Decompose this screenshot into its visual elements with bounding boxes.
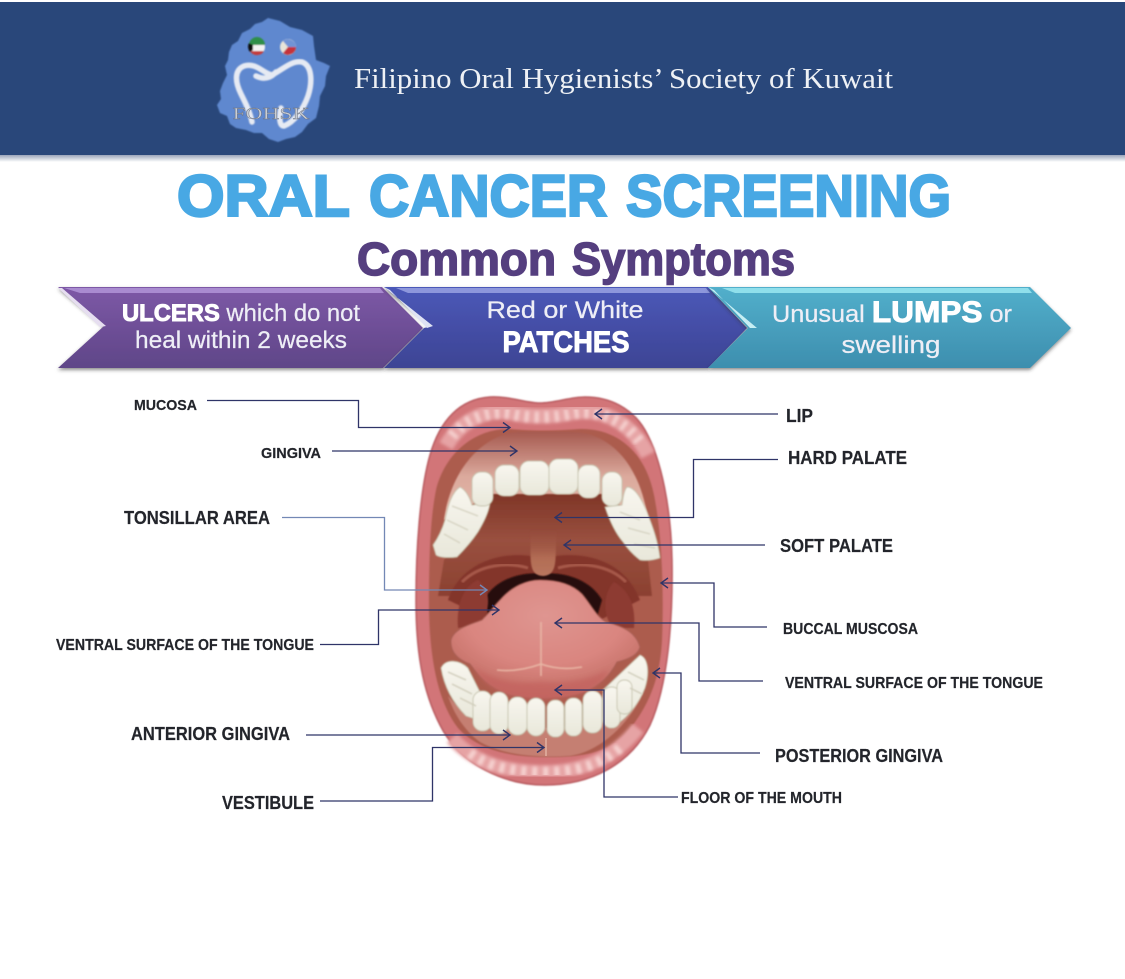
label: ventral surface right xyxy=(555,618,1043,692)
cavity xyxy=(429,429,663,757)
label: posterior gingiva xyxy=(653,668,943,766)
chevron: ulcers: ULCERS which do not xyxy=(122,300,360,327)
soft palate arches xyxy=(448,555,640,620)
label: ventral surface left xyxy=(56,605,499,654)
tooth outline xyxy=(236,62,311,126)
tongue midline xyxy=(497,622,582,676)
title: SCREENING xyxy=(626,164,951,229)
chevron: patches xyxy=(384,287,747,368)
mouth illustration xyxy=(416,397,672,785)
label: anterior gingiva xyxy=(131,724,510,744)
label: tonsillar area xyxy=(124,508,487,595)
label: soft palate xyxy=(564,536,893,556)
flag: Kuwait xyxy=(248,37,265,55)
title: ORAL xyxy=(177,164,350,229)
label: tonsillar area: TONSILLAR AREA xyxy=(124,508,270,528)
label: soft palate: SOFT PALATE xyxy=(780,536,893,556)
chevron: patches: Red or White xyxy=(486,297,644,324)
upper gingiva xyxy=(444,432,648,520)
label: floor of the mouth: FLOOR OF THE MOUTH xyxy=(681,790,842,807)
chevron: ulcers: heal within 2 weeks xyxy=(135,327,347,354)
label: buccal muscosa xyxy=(661,578,918,638)
symptom chevrons xyxy=(58,287,1071,368)
chevron: patches: PATCHES xyxy=(502,326,630,359)
throat xyxy=(484,573,602,620)
label: buccal muscosa: BUCCAL MUSCOSA xyxy=(783,621,918,638)
label: ventral surface right: VENTRAL SURFACE OF THE TONGUE xyxy=(785,675,1043,692)
lower lip band xyxy=(452,728,638,772)
organisation name: Filipino Oral Hygienists’ Society of Kuwait xyxy=(354,63,893,95)
label: vestibule: VESTIBULE xyxy=(222,793,314,813)
outer lip xyxy=(416,397,672,785)
palate xyxy=(438,494,652,596)
molar ridges xyxy=(444,506,655,548)
right tonsillar area xyxy=(605,582,634,628)
subtitle xyxy=(357,233,795,285)
label: lip: LIP xyxy=(786,406,813,426)
label: mucosa xyxy=(134,397,510,432)
upper teeth xyxy=(433,459,660,560)
subtitle: Common xyxy=(357,233,556,285)
logo: FOHSK tooth emblem xyxy=(217,18,330,142)
label: gingiva: GINGIVA xyxy=(261,445,321,462)
chevron: ulcers xyxy=(58,287,423,368)
upper lip texture xyxy=(452,412,640,442)
vestibule frenum xyxy=(545,738,547,756)
title xyxy=(177,164,951,229)
lower teeth xyxy=(441,655,648,737)
upper lip band xyxy=(446,412,648,455)
label: posterior gingiva: POSTERIOR GINGIVA xyxy=(775,746,943,766)
label: gingiva xyxy=(261,445,517,462)
left tonsillar area xyxy=(458,580,488,628)
lower gingiva xyxy=(448,690,644,757)
header band xyxy=(0,2,1125,162)
label: mucosa: MUCOSA xyxy=(134,397,197,414)
label: ventral surface left: VENTRAL SURFACE OF THE TONGUE xyxy=(56,637,314,654)
uvula xyxy=(530,530,557,576)
logo text: FOHSK xyxy=(232,104,310,123)
label: vestibule xyxy=(222,742,544,813)
floor of mouth shade xyxy=(475,668,608,700)
tongue xyxy=(451,580,640,698)
chevron: lumps: Unusual LUMPS or xyxy=(772,296,1012,329)
label: hard palate xyxy=(555,448,907,522)
chevron: lumps: swelling xyxy=(842,332,940,359)
chevron: lumps xyxy=(708,287,1071,368)
title: CANCER xyxy=(369,164,607,229)
label: hard palate: HARD PALATE xyxy=(788,448,907,468)
lower lip texture xyxy=(470,746,622,772)
label: lip xyxy=(595,406,813,426)
label: floor of the mouth xyxy=(555,685,842,807)
flag: Philippines xyxy=(280,39,296,55)
lower molar ridges xyxy=(448,672,644,706)
subtitle: Symptoms xyxy=(572,233,795,285)
label: anterior gingiva: ANTERIOR GINGIVA xyxy=(131,724,290,744)
